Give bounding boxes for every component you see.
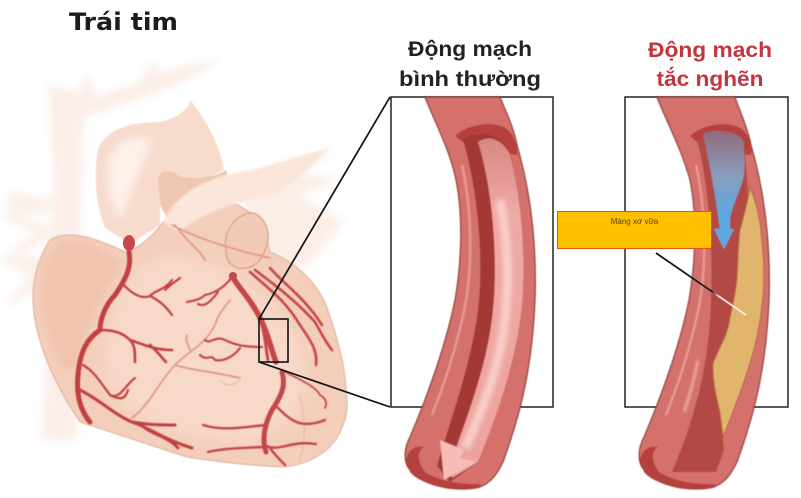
leader line to plaque (656, 253, 746, 315)
callout: Màng xơ vữa (558, 212, 712, 248)
faint branches (132, 225, 304, 460)
arrow (440, 440, 476, 480)
lower mouth (640, 447, 716, 489)
pulmonary trunk (158, 170, 227, 220)
background vessels (0, 58, 345, 440)
right coronary vessels (78, 252, 192, 448)
pulmonary arch (163, 148, 330, 232)
plaque (713, 187, 764, 437)
heading: Động mạch bình thường: Động mạch (408, 38, 532, 61)
artery knob (123, 235, 135, 251)
upper cut band (455, 124, 517, 155)
illustration: heart (0, 58, 347, 467)
lumen dark side (437, 134, 524, 482)
aorta (96, 100, 224, 244)
zoom marker on heart (259, 319, 288, 362)
outer wall (639, 97, 769, 489)
heading: Động mạch tắc nghẽn: Động mạch (648, 39, 772, 62)
heart body (33, 200, 347, 467)
heading: Động mạch tắc nghẽn: tắc nghẽn (656, 67, 764, 91)
outer wall (405, 97, 535, 489)
lumen bright side (450, 138, 524, 478)
heading: Động mạch tắc nghẽn (648, 39, 772, 91)
blue blood flow arrow (703, 131, 744, 249)
upper cut band (690, 124, 752, 155)
title: Trái tim: Trái tim (69, 8, 178, 36)
lower mouth (406, 447, 482, 489)
connector lines from heart to normal artery panel (259, 97, 390, 407)
panel: normal artery box (391, 97, 553, 407)
left coronary vessels (187, 268, 332, 465)
lumen (672, 134, 748, 472)
heading: Động mạch bình thường (399, 38, 541, 91)
artery: blocked (639, 97, 769, 489)
panel: blocked artery box (625, 97, 788, 407)
heading: Động mạch bình thường: bình thường (399, 68, 541, 91)
artery: normal (405, 97, 535, 489)
callout: Màng xơ vữa: Màng xơ vữa (611, 217, 659, 226)
